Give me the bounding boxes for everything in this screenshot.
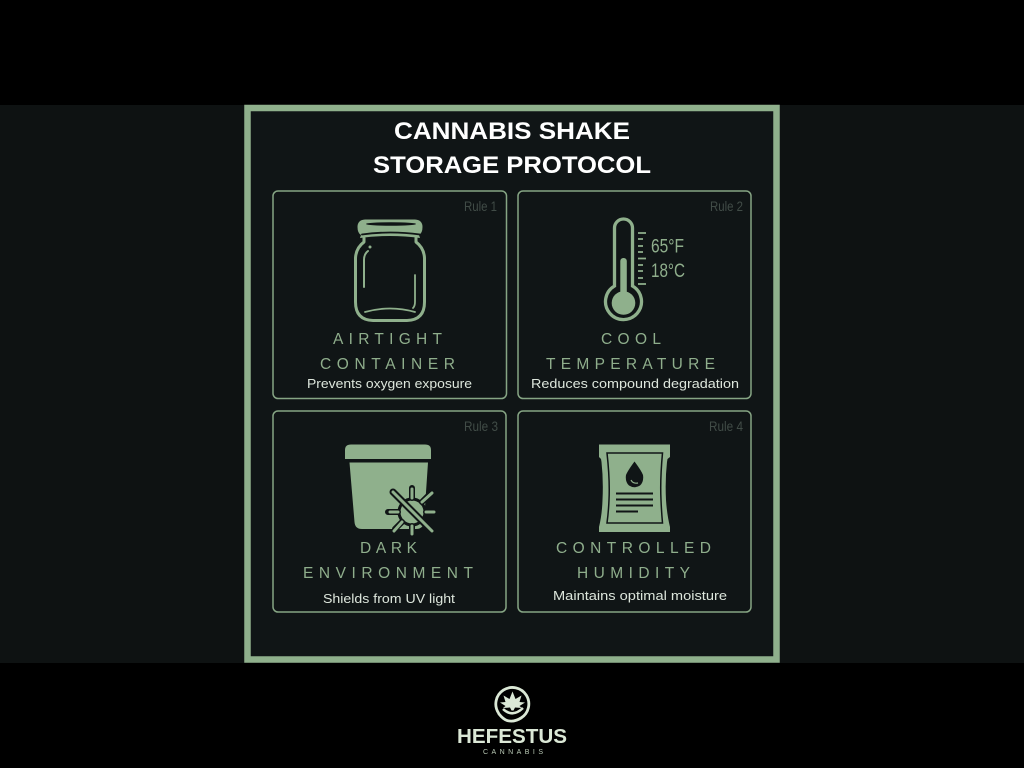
heading: cool temperature: TEMPERATURE <box>546 356 715 373</box>
icon: mason jar <box>356 220 424 320</box>
panel: rule 3 dark environment <box>273 411 506 612</box>
rule 3 label: Rule 3 <box>464 419 498 434</box>
wordmark: HEFESTUS <box>457 725 567 748</box>
description: moisture: Maintains optimal moisture <box>553 588 727 603</box>
icon: thermometer <box>606 219 685 320</box>
heading: controlled humidity: HUMIDITY <box>577 565 690 582</box>
heading: cool temperature <box>546 331 715 373</box>
description: uv: Shields from UV light <box>323 591 455 606</box>
rule 4 label: Rule 4 <box>709 419 743 434</box>
heading: dark environment: ENVIRONMENT <box>303 565 474 582</box>
heading: controlled humidity <box>556 540 711 582</box>
panel: rule 2 cool temperature <box>518 191 751 398</box>
panel: storage protocol frame <box>248 108 776 660</box>
icon: thermometer: 65°F <box>651 236 684 258</box>
icon: humidity pouch <box>599 444 670 532</box>
icon: leaf in circle <box>496 687 529 721</box>
heading: airtight container <box>320 331 455 373</box>
sub wordmark: CANNABIS <box>483 749 543 756</box>
logo: Hefestus Cannabis <box>457 687 567 756</box>
heading: dark environment <box>303 540 474 582</box>
panel: rule 1 airtight container <box>273 191 506 398</box>
rule 1 label: Rule 1 <box>464 199 497 214</box>
heading: cool temperature: COOL <box>601 331 661 348</box>
title: CANNABIS SHAKE <box>394 118 630 145</box>
heading: airtight container: CONTAINER <box>320 356 455 373</box>
title <box>373 118 651 179</box>
icon: thermometer: 18°C <box>651 261 685 282</box>
rule 2 label: Rule 2 <box>710 199 743 214</box>
description: oxygen: Prevents oxygen exposure <box>307 376 472 391</box>
description: degradation: Reduces compound degradation <box>531 376 739 391</box>
heading: dark environment: DARK <box>360 540 418 557</box>
icon: opaque container with crossed-out sun <box>345 444 434 534</box>
heading: controlled humidity: CONTROLLED <box>556 540 711 557</box>
heading: airtight container: AIRTIGHT <box>333 331 443 348</box>
title: STORAGE PROTOCOL <box>373 152 651 179</box>
panel: rule 4 controlled humidity <box>518 411 751 612</box>
